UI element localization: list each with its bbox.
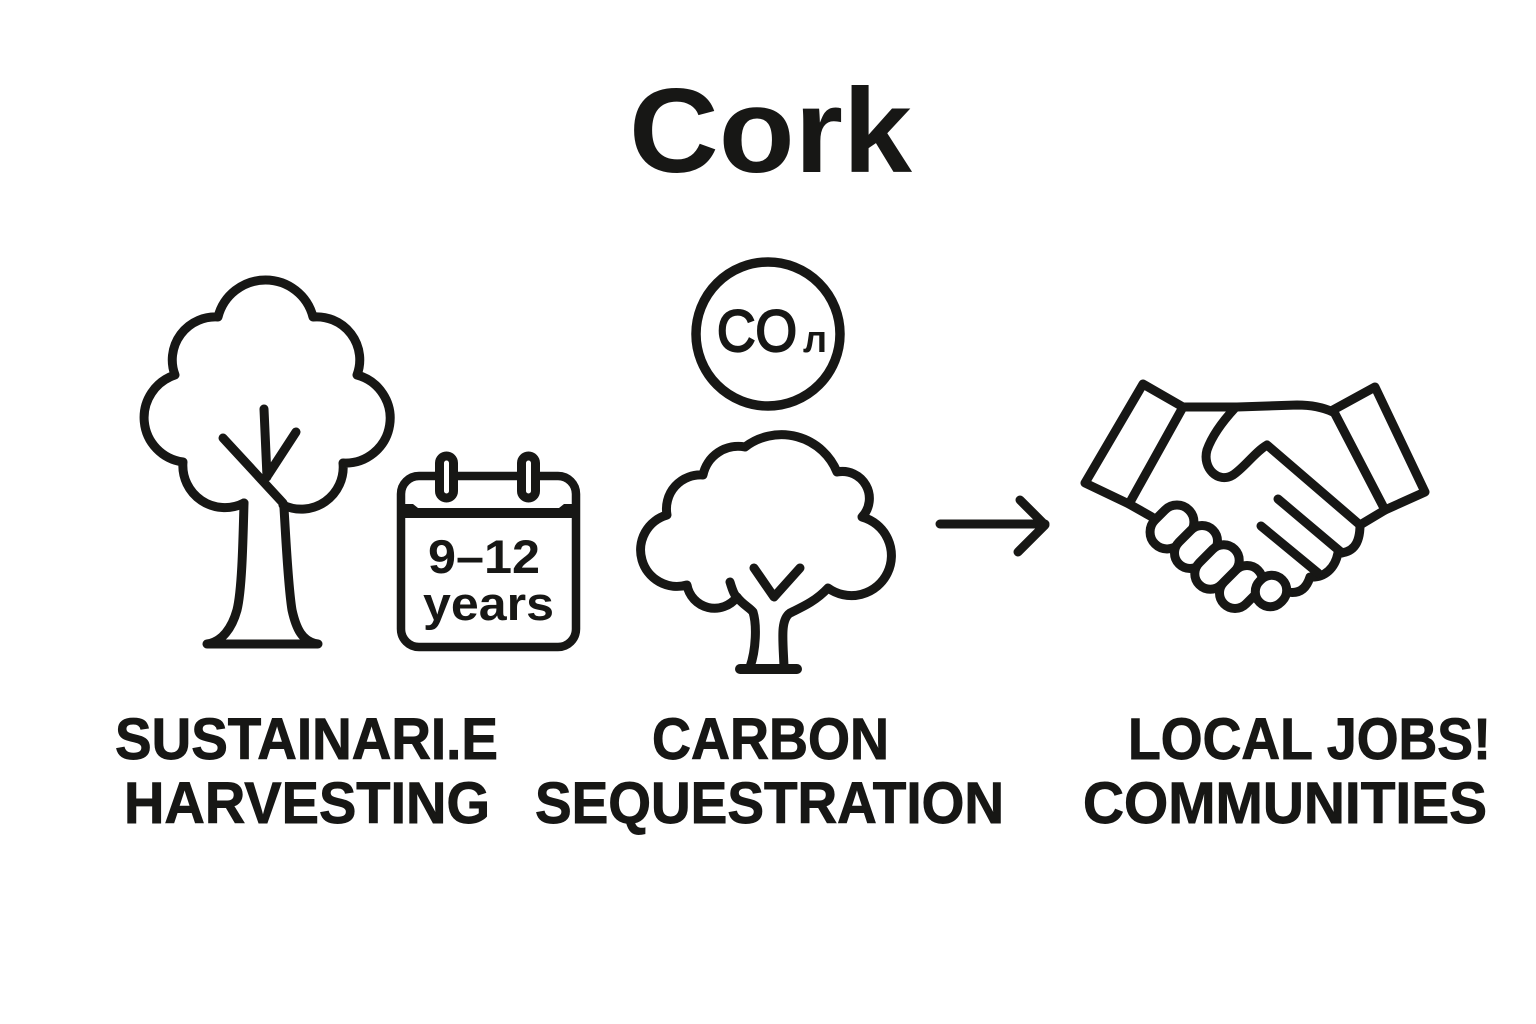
arrow: [940, 500, 1045, 552]
label: sustainable harvesting: [115, 707, 498, 836]
icon: handshake: [1085, 384, 1425, 615]
icon: CO2 circle: CO: [717, 299, 797, 364]
icon: large tree: [144, 280, 390, 644]
label: carbon sequestration: [535, 707, 1004, 836]
title: Cork: [629, 64, 912, 198]
calendar number: 9–12: [428, 530, 540, 583]
label: carbon sequestration: SEQUESTRATION: [535, 771, 1004, 836]
label: local jobs communities: COMMUNITIES: [1083, 771, 1487, 836]
icon: calendar 9–12 years: [401, 456, 576, 647]
label: local jobs communities: [1083, 707, 1491, 836]
label: local jobs communities: LOCAL JOBS!: [1128, 707, 1491, 772]
icon: round tree: [641, 435, 891, 669]
panel: local jobs and communities: [1083, 384, 1491, 836]
panel: carbon sequestration: [535, 262, 1004, 836]
calendar unit: years: [423, 577, 554, 630]
label: sustainable harvesting: SUSTAINARI.E: [115, 707, 498, 772]
label: carbon sequestration: CARBON: [652, 707, 889, 772]
panel: sustainable harvesting: [115, 280, 576, 836]
icon: CO2 circle: л: [803, 319, 827, 361]
icon: CO2 circle: [696, 262, 840, 406]
label: sustainable harvesting: HARVESTING: [124, 771, 490, 836]
